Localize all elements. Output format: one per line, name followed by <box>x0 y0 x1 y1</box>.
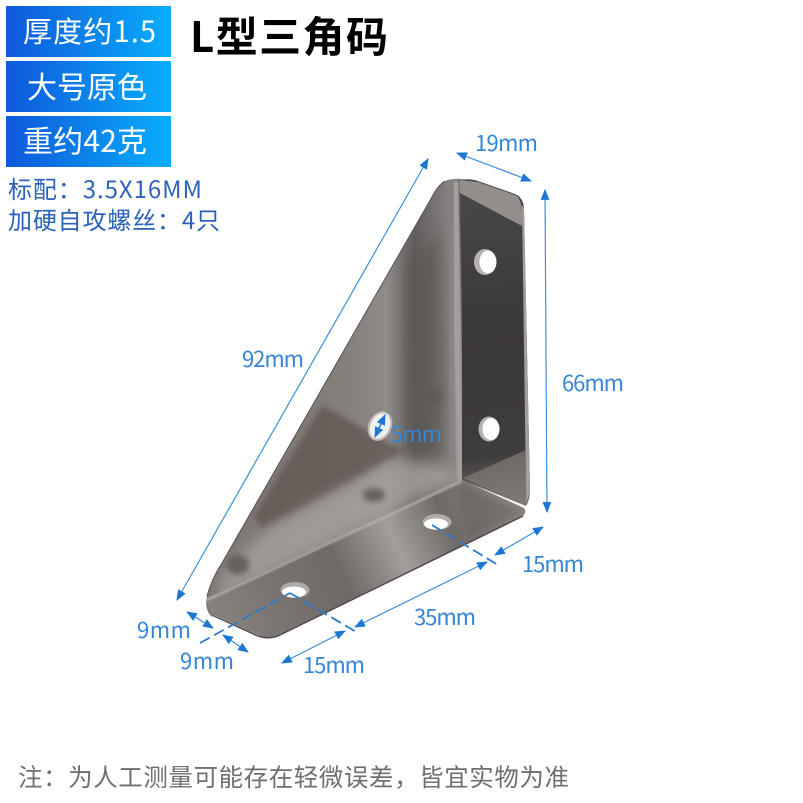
badge: weight <box>6 116 171 167</box>
base corner reflection <box>458 486 522 538</box>
dimension: width 19mm <box>457 126 538 181</box>
vertical bend highlight <box>455 182 461 480</box>
base flange lower edge <box>214 516 523 638</box>
hole: plate centre <box>364 408 396 444</box>
dimension: corner 9mm lower: 9mm <box>180 644 234 676</box>
dimension: overall length 92mm: 92mm <box>242 342 304 374</box>
footnote: 注：为人工测量可能存在轻微误差，皆宜实物为准 <box>18 759 569 794</box>
plate light reflection <box>215 456 452 600</box>
plate soft spot marks <box>225 485 388 578</box>
upper plate edge <box>207 181 445 596</box>
dimension: hole diameter 5mm: 5mm <box>391 417 442 449</box>
dimension: overall length 92mm <box>177 159 428 600</box>
upright flange top highlight <box>459 180 522 226</box>
plate dark vertical band <box>405 230 445 462</box>
dimension: edge 15mm right <box>495 527 584 579</box>
badge: weight: 重约42克 <box>23 117 147 161</box>
upright flange <box>458 179 530 506</box>
triangular plate <box>206 179 464 617</box>
plate diagonal reflection <box>255 405 405 530</box>
dimension: width 19mm: 19mm <box>475 126 538 158</box>
badge: size and finish: 大号原色 <box>27 63 147 107</box>
dimension: corner 9mm lower <box>180 635 248 676</box>
dimension: edge 15mm right: 15mm <box>522 547 584 579</box>
badge: thickness <box>6 6 171 57</box>
dimension: height 66mm: 66mm <box>562 366 624 398</box>
text: screw count: 加硬自攻螺丝：4只 <box>8 201 220 236</box>
dashed guide lines <box>200 525 498 643</box>
bracket photo <box>206 179 530 638</box>
hole: base left <box>280 582 310 598</box>
dimension: corner 9mm upper: 9mm <box>137 613 191 645</box>
dimension: hole spacing 35mm <box>355 562 487 632</box>
dimension: edge 15mm left: 15mm <box>303 648 365 680</box>
upright flange light edge <box>522 205 530 503</box>
text: standard screw size: 标配：3.5X16MM <box>8 170 202 205</box>
title: L型三角码 <box>190 4 388 65</box>
base flange <box>207 480 525 638</box>
dimension: hole spacing 35mm: 35mm <box>414 600 476 632</box>
badge: size and finish <box>6 61 171 112</box>
dimension: edge 15mm left <box>282 631 365 680</box>
upright flange bottom reflection <box>463 450 526 506</box>
hole: upright top <box>474 249 496 275</box>
badge: thickness: 厚度约1.5 <box>23 9 156 51</box>
hole: upright bottom <box>478 416 500 442</box>
plate shading clipped to outline <box>215 230 452 600</box>
base flange bend highlight <box>207 481 462 600</box>
hole: base right <box>422 514 452 530</box>
dimension: corner 9mm upper <box>137 612 213 645</box>
